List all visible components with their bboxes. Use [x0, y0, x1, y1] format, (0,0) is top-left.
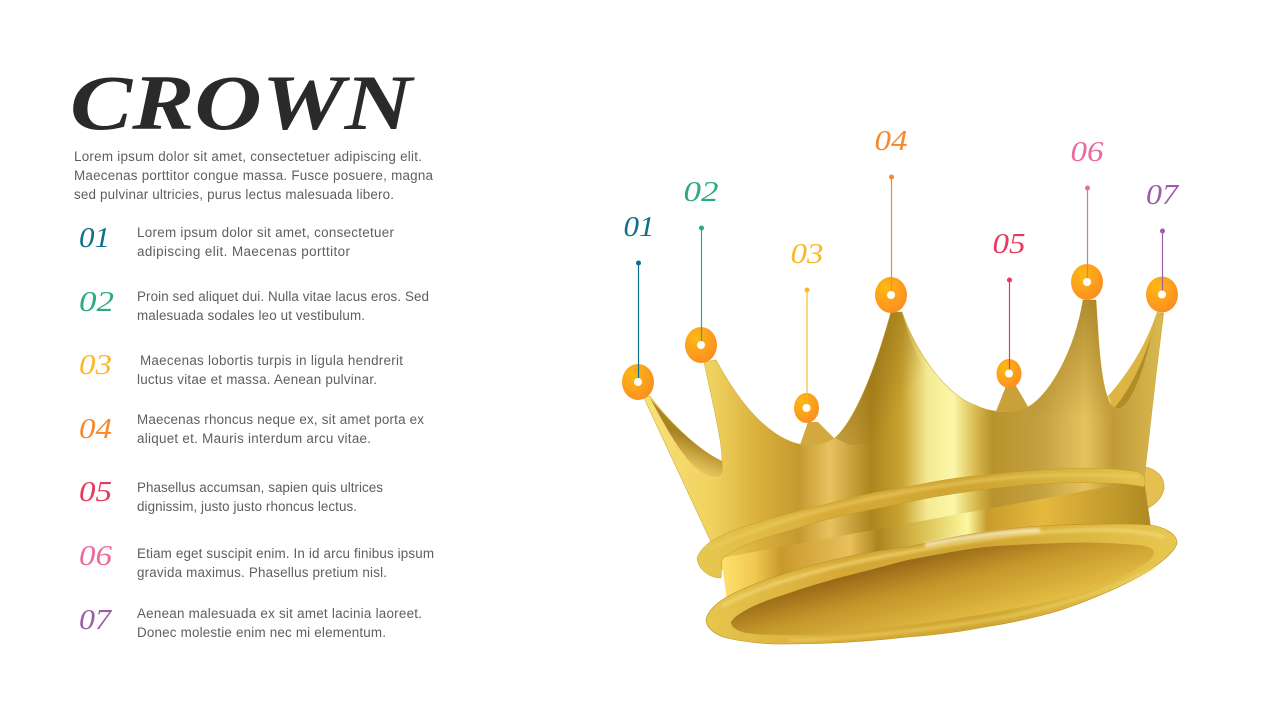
- list item 04: aliquet et. Mauris interdum arcu vitae.: [137, 431, 371, 446]
- list item 05: [79, 477, 383, 514]
- back spike right: [1108, 312, 1164, 425]
- callout 05: [992, 229, 1026, 388]
- list item 04: 04: [79, 414, 112, 445]
- back ring lobes: [1140, 466, 1164, 509]
- list item 04: Maecenas rhoncus neque ex, sit amet porta ex: [137, 412, 424, 427]
- crown illustration: [644, 300, 1177, 644]
- list item 07: Aenean malesuada ex sit amet lacinia laoreet.: [137, 606, 422, 621]
- list item 01: Lorem ipsum dolor sit amet, consectetuer: [137, 225, 395, 240]
- list item 07: 07: [79, 605, 112, 636]
- callout 06: 06: [1070, 137, 1104, 168]
- list item 03: Maecenas lobortis turpis in ligula hendrerit: [140, 353, 403, 368]
- list item 02: Proin sed aliquet dui. Nulla vitae lacus eros. Sed: [137, 289, 429, 304]
- list item 06: Etiam eget suscipit enim. In id arcu finibus ipsum: [137, 546, 434, 561]
- callout 02: 02: [684, 177, 718, 208]
- list item 07: Donec molestie enim nec mi elementum.: [137, 625, 386, 640]
- callout 03: [790, 239, 824, 423]
- front rim: [706, 524, 1177, 644]
- lower rim glint: [790, 567, 1155, 640]
- intro paragraph: [74, 149, 434, 202]
- list item 05: 05: [79, 477, 112, 508]
- intro paragraph: sed pulvinar ultricies, purus lectus malesuada libero.: [74, 187, 394, 202]
- list item 02: [79, 287, 429, 323]
- upper ring: [697, 468, 1145, 578]
- list item 05: Phasellus accumsan, sapien quis ultrices: [137, 480, 383, 495]
- list item 06: gravida maximus. Phasellus pretium nisl.: [137, 565, 387, 580]
- list item 03: [79, 350, 403, 387]
- crown body: [644, 300, 1163, 575]
- list item 05: dignissim, justo justo rhoncus lectus.: [137, 499, 357, 514]
- intro paragraph: Maecenas porttitor congue massa. Fusce posuere, magna: [74, 168, 434, 183]
- callout 04: [874, 126, 908, 313]
- list item 02: 02: [79, 287, 114, 318]
- rim glint: [925, 530, 1040, 545]
- callout 07: 07: [1146, 180, 1179, 211]
- left notch shadow: [650, 398, 723, 477]
- callout 05: 05: [992, 229, 1026, 260]
- callout 04: 04: [874, 126, 908, 157]
- spike shading: [835, 312, 945, 445]
- list item 04: [79, 412, 424, 446]
- list item 06: 06: [79, 541, 112, 572]
- intro paragraph: Lorem ipsum dolor sit amet, consectetuer adipiscing elit.: [74, 149, 422, 164]
- list item 01: [79, 223, 395, 259]
- list item 02: malesuada sodales leo ut vestibulum.: [137, 308, 365, 323]
- crown interior: [731, 543, 1154, 635]
- spike 06 shading: [1028, 300, 1108, 425]
- callout 06: [1070, 137, 1104, 300]
- list item 01: adipiscing elit. Maecenas porttitor: [137, 244, 351, 259]
- callout 02: [684, 177, 718, 363]
- list item 06: [79, 541, 434, 580]
- callout 01: [622, 212, 654, 400]
- upper ring highlight: [712, 475, 1138, 548]
- small back spike 03: [800, 422, 836, 449]
- title: CROWN: [70, 59, 415, 146]
- list item 03: luctus vitae et massa. Aenean pulvinar.: [137, 372, 377, 387]
- callout 07: [1146, 180, 1179, 312]
- small back spike 05: [995, 386, 1030, 418]
- list item 07: [79, 605, 422, 640]
- crown band: [721, 480, 1151, 600]
- list item 03: 03: [79, 350, 112, 381]
- callout 01: 01: [624, 212, 654, 243]
- callout 03: 03: [790, 239, 824, 270]
- list item 01: 01: [79, 223, 110, 254]
- rim highlight: [722, 530, 1165, 606]
